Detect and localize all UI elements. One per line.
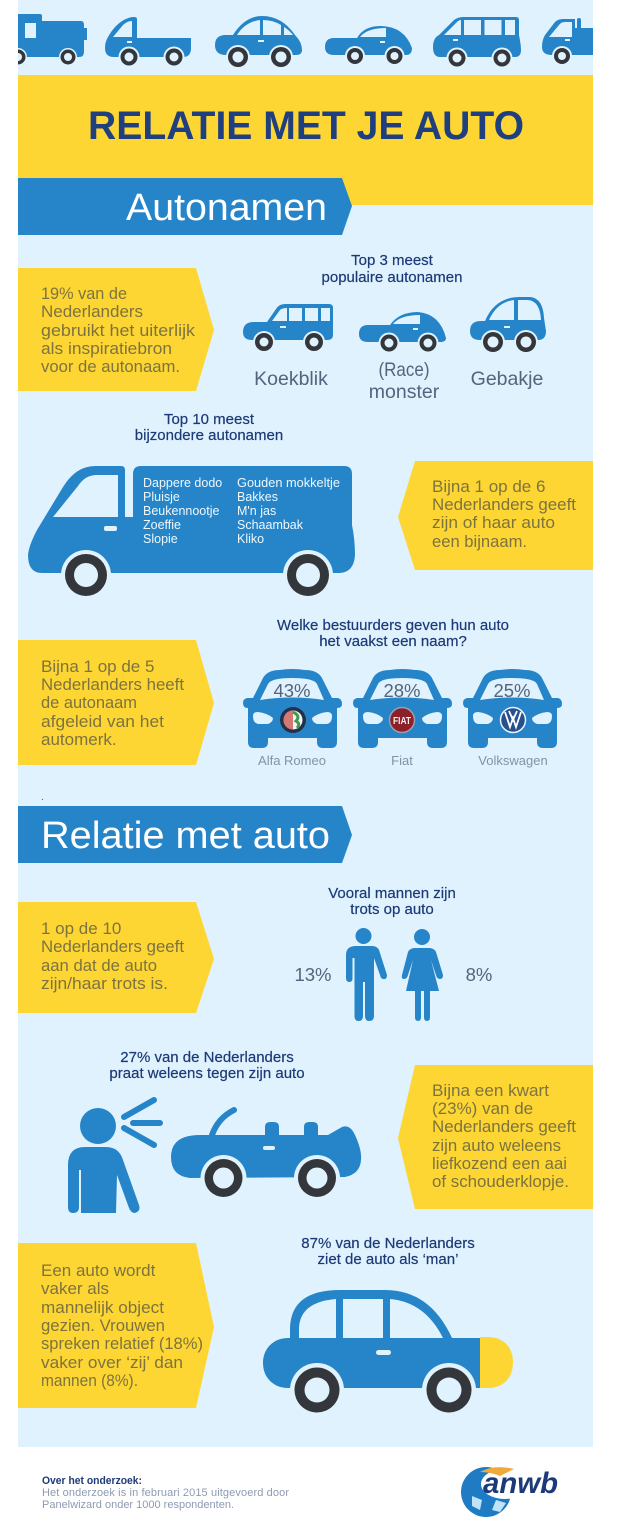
callout: mannelijk object xyxy=(18,1243,214,1408)
callout: mannelijk object: gezien. Vrouwen xyxy=(41,1316,165,1335)
section ribbon: Relatie met auto xyxy=(18,806,352,863)
list: names right: Bakkes xyxy=(237,490,278,504)
top row of vehicles xyxy=(9,14,593,69)
icon: convertible xyxy=(171,1110,361,1201)
labels: merken: Fiat xyxy=(391,753,413,768)
logo: anwb xyxy=(461,1467,558,1517)
callout: automerk: automerk. xyxy=(41,730,117,749)
list: names right: Gouden mokkeltje xyxy=(237,476,340,490)
callout: bijnaam: Nederlanders geeft xyxy=(432,495,576,514)
callout: aai: liefkozend een aai xyxy=(432,1154,567,1173)
car front: Fiat xyxy=(353,669,452,748)
logo: Fiat: FIAT xyxy=(393,716,411,727)
labels: populaire namen: (Race) xyxy=(378,359,430,381)
footer note xyxy=(42,1475,289,1511)
callout: aai: zijn auto weleens xyxy=(432,1136,561,1155)
title: RELATIE MET JE AUTO xyxy=(88,104,524,148)
heading: top 3: populaire autonamen xyxy=(322,269,462,286)
section ribbon: Relatie met auto: Relatie met auto xyxy=(41,815,330,857)
labels: merken xyxy=(258,753,548,768)
car front: Volkswagen: 25% xyxy=(493,680,531,701)
icon: van body xyxy=(28,466,355,573)
callout: mannelijk object: Een auto wordt xyxy=(41,1261,156,1280)
list: names right: Schaambak xyxy=(237,518,304,532)
callout: trots: 1 op de 10 xyxy=(41,919,121,938)
callout: uiterlijk: Nederlanders xyxy=(41,302,143,321)
list: names left xyxy=(143,476,222,546)
labels: merken: Volkswagen xyxy=(478,753,548,768)
heading: bestuurders xyxy=(277,617,509,650)
callout: mannelijk object: vaker over ‘zij’ dan xyxy=(41,1353,183,1372)
stray dot: . xyxy=(41,792,44,803)
heading: top 3 xyxy=(322,252,462,286)
heading: bestuurders: Welke bestuurders geven hun auto xyxy=(277,617,509,634)
callout: uiterlijk xyxy=(18,268,214,391)
stat: 13%: 13% xyxy=(294,964,332,985)
heading: mannen trots xyxy=(328,885,456,918)
callout: aai: Bijna een kwart xyxy=(432,1081,549,1100)
callout: automerk: Nederlanders heeft xyxy=(41,675,184,694)
icon: Gebakje car xyxy=(470,297,546,354)
callout: uiterlijk: 19% van de xyxy=(41,284,127,303)
heading: bestuurders: het vaakst een naam? xyxy=(319,633,467,650)
footer note: Het onderzoek is in februari 2015 uitgevoerd door xyxy=(42,1487,289,1499)
car front: Volkswagen xyxy=(463,669,562,748)
heading: top 3: Top 3 meest xyxy=(351,252,434,269)
callout: aai xyxy=(398,1065,593,1209)
heading: top 10 xyxy=(135,411,283,444)
callout: mannelijk object: mannelijk object xyxy=(41,1298,164,1317)
callout: bijnaam xyxy=(398,461,593,570)
list: names right: Kliko xyxy=(237,532,264,546)
heading: mannen trots: trots op auto xyxy=(350,901,434,918)
list: names left: Beukennootje xyxy=(143,504,220,518)
heading: auto als man: ziet de auto als ‘man’ xyxy=(318,1251,458,1268)
heading: praat tegen auto: 27% van de Nederlanders xyxy=(120,1049,294,1066)
icon: big car xyxy=(263,1290,513,1417)
logo: Volkswagen xyxy=(500,708,526,732)
heading: mannen trots: Vooral mannen zijn xyxy=(328,885,456,902)
callout: aai: Nederlanders geeft xyxy=(432,1117,576,1136)
callout: automerk: afgeleid van het xyxy=(41,712,164,731)
callout: automerk: de autonaam xyxy=(41,693,137,712)
icon: Raceauto xyxy=(359,312,446,354)
car front: Alfa Romeo xyxy=(243,669,342,748)
icon: Koekblik van xyxy=(243,304,333,353)
callout: mannelijk object: vaker als xyxy=(41,1279,109,1298)
list: names left: Zoeffie xyxy=(143,518,181,532)
section ribbon: Autonamen xyxy=(18,178,352,235)
heading: praat tegen auto: praat weleens tegen zijn auto xyxy=(109,1065,305,1082)
heading: auto als man: 87% van de Nederlanders xyxy=(301,1235,475,1252)
callout: bijnaam: een bijnaam. xyxy=(432,532,527,551)
icon: camper xyxy=(18,14,87,64)
icon: van window xyxy=(53,475,118,517)
callout: uiterlijk: als inspiratiebron xyxy=(41,339,172,358)
callout: trots: zijn/haar trots is. xyxy=(41,974,168,993)
callout: trots xyxy=(18,902,214,1013)
callout: automerk xyxy=(18,640,214,765)
icon: sports car xyxy=(325,26,412,66)
car front: Alfa Romeo: 43% xyxy=(273,680,311,701)
labels: populaire namen xyxy=(254,359,543,403)
callout: mannelijk object: mannen (8%). xyxy=(41,1371,138,1390)
callout: aai: (23%) van de xyxy=(432,1099,533,1118)
footer note: Panelwizard onder 1000 respondenten. xyxy=(42,1499,234,1511)
labels: merken: Alfa Romeo xyxy=(258,753,326,768)
heading: praat tegen auto xyxy=(109,1049,305,1082)
icon: van xyxy=(433,17,521,68)
callout: uiterlijk: gebruikt het uiterlijk xyxy=(41,321,196,340)
stat: 8%: 8% xyxy=(466,964,492,985)
big van with names xyxy=(28,466,355,600)
car front: Fiat: 28% xyxy=(383,680,421,701)
callout: automerk: Bijna 1 op de 5 xyxy=(41,657,154,676)
list: names right: M'n jas xyxy=(237,504,276,518)
callout: bijnaam: zijn of haar auto xyxy=(432,513,555,532)
callout: bijnaam: Bijna 1 op de 6 xyxy=(432,477,545,496)
heading: auto als man xyxy=(301,1235,475,1268)
labels: populaire namen: Koekblik xyxy=(254,368,328,390)
labels: populaire namen: Gebakje xyxy=(471,368,543,390)
icon: man xyxy=(346,928,387,1021)
icon: woman xyxy=(402,929,443,1021)
list: names left: Dappere dodo xyxy=(143,476,222,490)
list: names left: Pluisje xyxy=(143,490,180,504)
section ribbon: Autonamen: Autonamen xyxy=(126,187,327,229)
list: names right xyxy=(237,476,340,546)
footer note: Over het onderzoek: xyxy=(42,1475,142,1487)
heading: top 10: bijzondere autonamen xyxy=(135,427,283,444)
title banner xyxy=(18,75,593,205)
callout: trots: Nederlanders geeft xyxy=(41,937,184,956)
logo: anwb: anwb xyxy=(483,1467,558,1500)
callout: uiterlijk: voor de autonaam. xyxy=(41,357,180,376)
callout: mannelijk object: spreken relatief (18%) xyxy=(41,1334,203,1353)
list: names left: Slopie xyxy=(143,532,178,546)
icon: pickup xyxy=(105,17,191,68)
icon: beetle car xyxy=(215,16,302,69)
icon: speaking person xyxy=(68,1100,160,1213)
callout: aai: of schouderklopje. xyxy=(432,1172,569,1191)
icon: truck xyxy=(542,18,593,66)
logo: Alfa Romeo xyxy=(280,707,306,733)
labels: populaire namen: monster xyxy=(369,381,440,403)
heading: top 10: Top 10 meest xyxy=(164,411,255,428)
icon: van wheels xyxy=(61,550,333,600)
callout: trots: aan dat de auto xyxy=(41,956,157,975)
